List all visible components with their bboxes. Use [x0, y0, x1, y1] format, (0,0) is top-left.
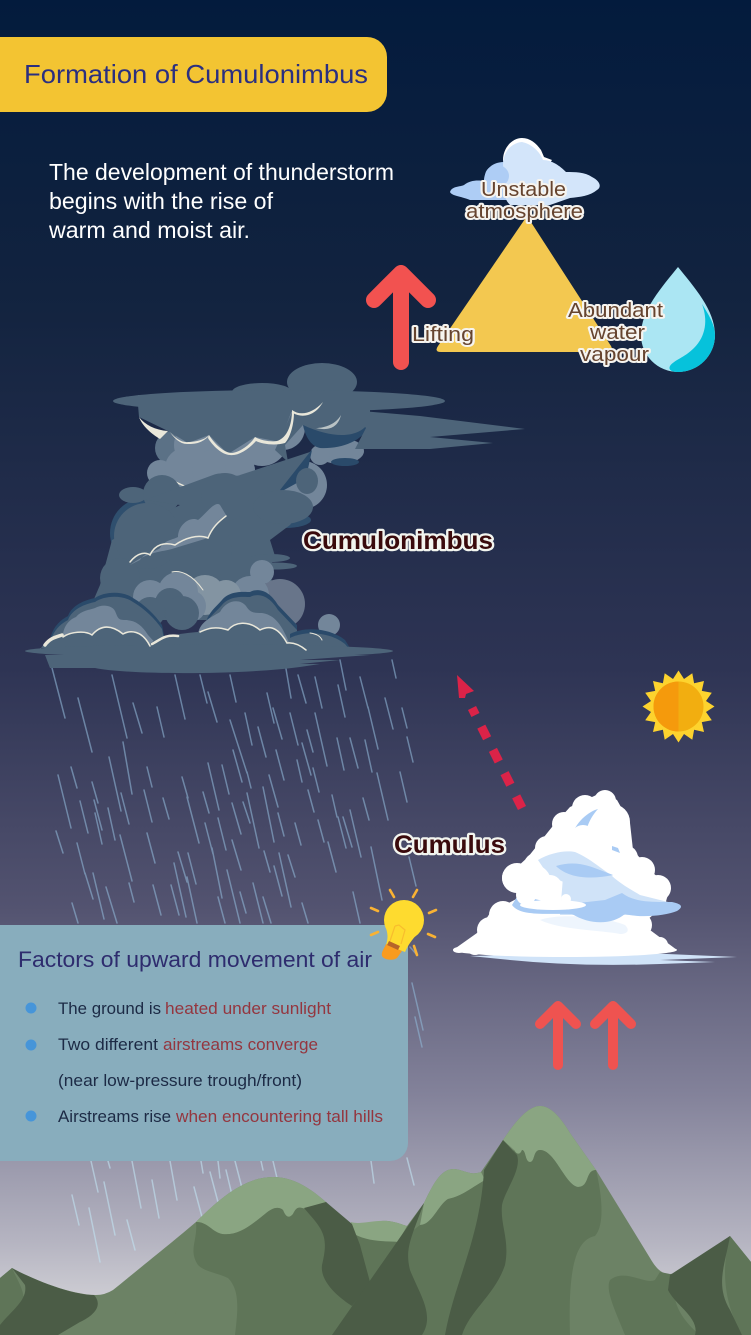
bullet 2: airstreams converge — [163, 1035, 318, 1054]
bullet 3: Airstreams rise — [58, 1107, 171, 1126]
bullet 2 — [58, 1035, 318, 1054]
panel heading: Factors of upward movement of air — [18, 947, 372, 972]
twin red arrows — [540, 1006, 631, 1065]
label: unstable atmosphere: Unstable — [481, 179, 566, 201]
intro text: begins with the rise of — [49, 188, 274, 214]
right dome — [198, 590, 297, 645]
dark faces — [0, 1140, 742, 1335]
back grey billows — [147, 406, 364, 512]
white billows — [453, 790, 677, 957]
cream anvil highlights — [139, 402, 341, 488]
blue band shading — [512, 809, 681, 922]
bullet 2: Two different — [58, 1035, 158, 1054]
title banner — [0, 37, 387, 112]
cream lower highlights — [45, 516, 322, 650]
mountains — [0, 1106, 751, 1335]
front billows — [502, 817, 595, 910]
intro text: The development of thunderstorm — [49, 159, 394, 185]
bullet 3 — [58, 1107, 383, 1126]
icon: water drop — [641, 267, 715, 372]
base silhouette — [0, 1106, 751, 1335]
label: abundant water vapour — [568, 300, 663, 366]
cumulonimbus cloud — [25, 363, 525, 673]
lower blue lobes — [135, 588, 199, 630]
inner blue lobes — [275, 403, 370, 494]
triangle — [437, 216, 612, 352]
intro text: warm and moist air. — [48, 217, 250, 243]
white silhouette core — [453, 792, 677, 950]
icon: small cloud — [450, 138, 600, 205]
bullet points — [26, 1002, 36, 1122]
rain — [52, 660, 423, 1262]
main body — [85, 452, 313, 620]
faint lower shading — [540, 916, 628, 934]
label: abundant water vapour: vapour — [580, 344, 649, 366]
bullet 1 — [58, 999, 331, 1018]
mid green faces — [0, 1150, 751, 1335]
left dome — [50, 593, 165, 648]
icon: light bulb — [371, 890, 436, 960]
label: abundant water vapour: water — [589, 322, 645, 344]
icon: red lifting arrow — [374, 273, 428, 362]
bullet 1: The ground is — [58, 999, 161, 1018]
body dark rims — [110, 498, 311, 568]
dashed arrow — [457, 675, 522, 808]
pale band shading — [538, 851, 680, 915]
label: cumulonimbus: Cumulonimbus — [303, 527, 493, 555]
label: lifting: Lifting — [412, 324, 474, 346]
light peak caps — [196, 1106, 596, 1243]
triangle diagram — [374, 138, 715, 372]
anvil — [113, 363, 525, 454]
label: abundant water vapour: Abundant — [568, 300, 663, 322]
cloud base — [25, 623, 393, 673]
label: unstable atmosphere — [466, 179, 583, 223]
bullet 2 note: (near low-pressure trough/front) — [58, 1071, 302, 1090]
bullet 1: heated under sunlight — [165, 999, 331, 1018]
far right lobe — [290, 614, 350, 650]
intro text — [48, 159, 394, 243]
label: cumulus: Cumulus — [394, 831, 505, 859]
lighter left slope — [58, 1295, 177, 1335]
title: Formation of Cumulonimbus — [24, 59, 368, 89]
icon: sun — [642, 670, 714, 742]
upper dark rims — [270, 425, 370, 495]
base shadow — [470, 952, 737, 965]
panel: factors — [0, 925, 408, 1161]
bullet 3: when encountering tall hills — [175, 1107, 383, 1126]
label: unstable atmosphere: atmosphere — [466, 201, 583, 223]
cumulus cloud — [453, 790, 737, 965]
mid grey billows — [130, 504, 305, 629]
